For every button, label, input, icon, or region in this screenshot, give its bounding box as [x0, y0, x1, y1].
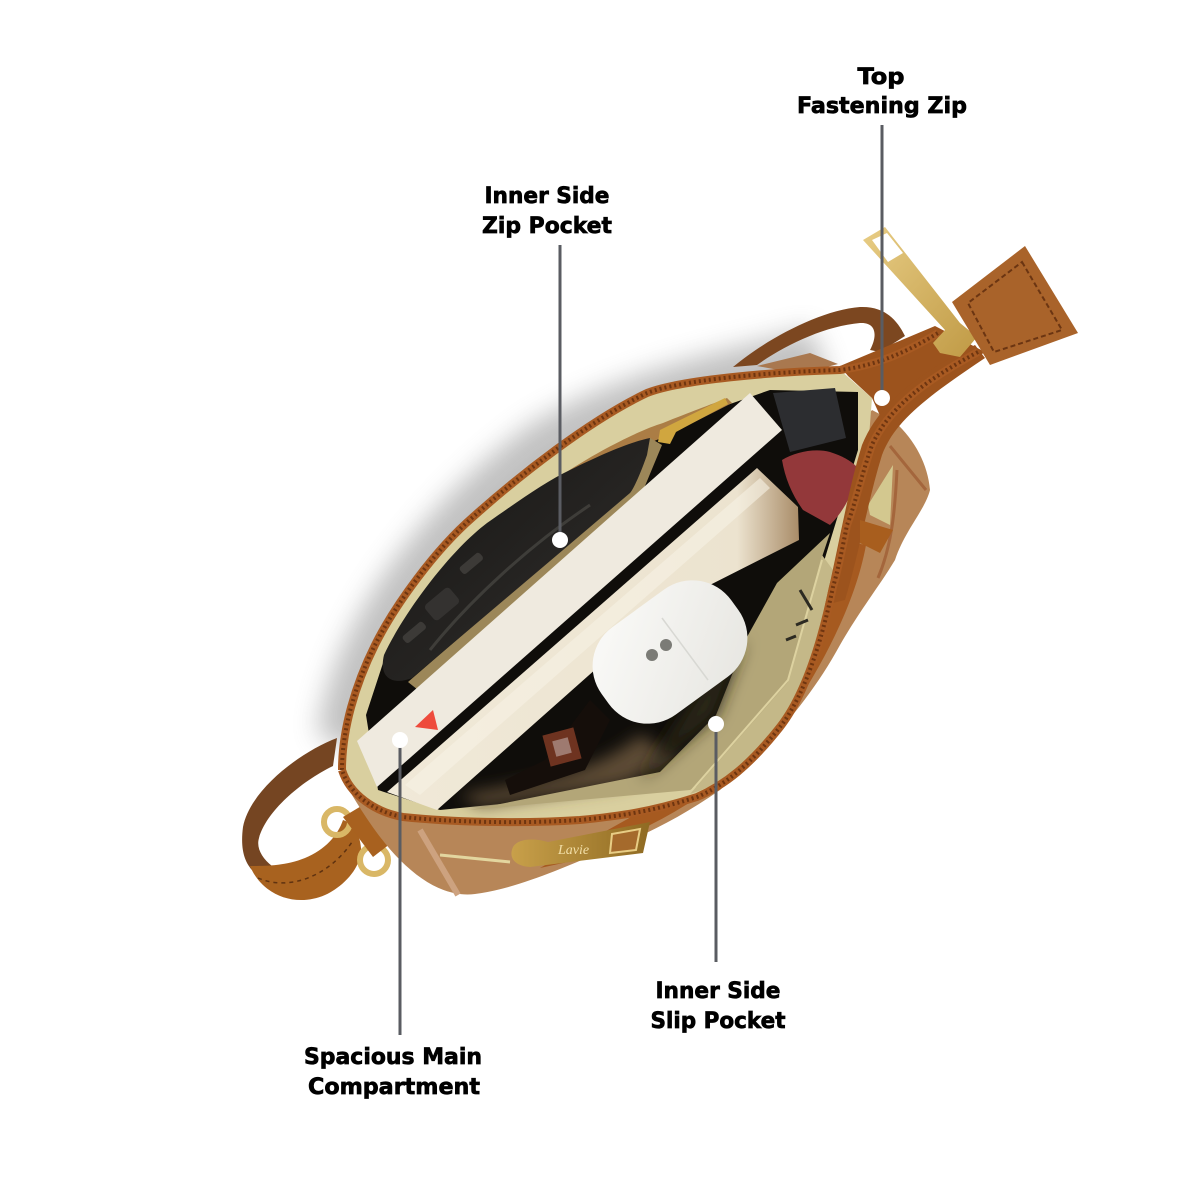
white book — [357, 393, 782, 787]
side slit lining — [868, 465, 893, 525]
leader line — [880, 125, 884, 398]
bag body leather — [340, 410, 930, 894]
illustration: open handbag — [242, 227, 1078, 900]
cream book — [387, 468, 799, 810]
wireless earbud case — [574, 561, 766, 743]
gold logo plaque — [511, 822, 650, 867]
side pocket zip pull — [860, 520, 893, 553]
bottom strap — [242, 738, 361, 900]
gold zip puller — [863, 227, 977, 357]
opening lining — [342, 370, 872, 822]
strap ring clasp — [324, 805, 395, 874]
interior floor — [460, 735, 680, 806]
marker dot — [874, 390, 890, 406]
callout: Inner Side Zip Pocket — [482, 184, 612, 548]
leather zip tag — [952, 246, 1078, 365]
front seam — [420, 830, 458, 895]
label: Spacious Main — [304, 1045, 482, 1070]
marker dot — [708, 716, 724, 732]
right zip fabric — [825, 345, 985, 605]
phone — [383, 438, 650, 681]
sunglasses — [505, 700, 610, 795]
label line two: Compartment — [308, 1075, 480, 1100]
marker dot — [552, 532, 568, 548]
callout: Inner Side Slip Pocket — [650, 716, 786, 1034]
label: Inner Side — [484, 184, 610, 209]
zip junction fabric — [840, 326, 985, 420]
label line two: Fastening Zip — [797, 94, 967, 119]
zip track — [342, 333, 978, 822]
leader line — [558, 245, 562, 540]
top strap — [733, 307, 905, 367]
red lipstick — [782, 450, 857, 525]
inner side zip pocket — [383, 398, 732, 690]
leader line — [714, 724, 718, 962]
lower zip fabric — [540, 540, 866, 868]
label: Top — [858, 65, 904, 90]
leader line — [398, 740, 402, 1035]
callout: Spacious Main Compartment — [304, 732, 482, 1100]
callout: Top Fastening Zip — [797, 65, 967, 406]
zip pull — [658, 398, 728, 444]
black cosmetic cube — [773, 388, 846, 452]
right pocket seam — [878, 446, 926, 578]
interior dark — [366, 390, 858, 810]
rear top of bag — [757, 353, 838, 374]
cast shadow — [318, 328, 830, 770]
gold logo plaque: Lavie — [557, 843, 589, 858]
slip pocket lining — [470, 533, 833, 810]
marker dot — [392, 732, 408, 748]
label: Inner Side — [656, 979, 780, 1004]
front slit — [440, 855, 510, 862]
label line two: Zip Pocket — [482, 214, 612, 239]
label line two: Slip Pocket — [650, 1009, 786, 1034]
